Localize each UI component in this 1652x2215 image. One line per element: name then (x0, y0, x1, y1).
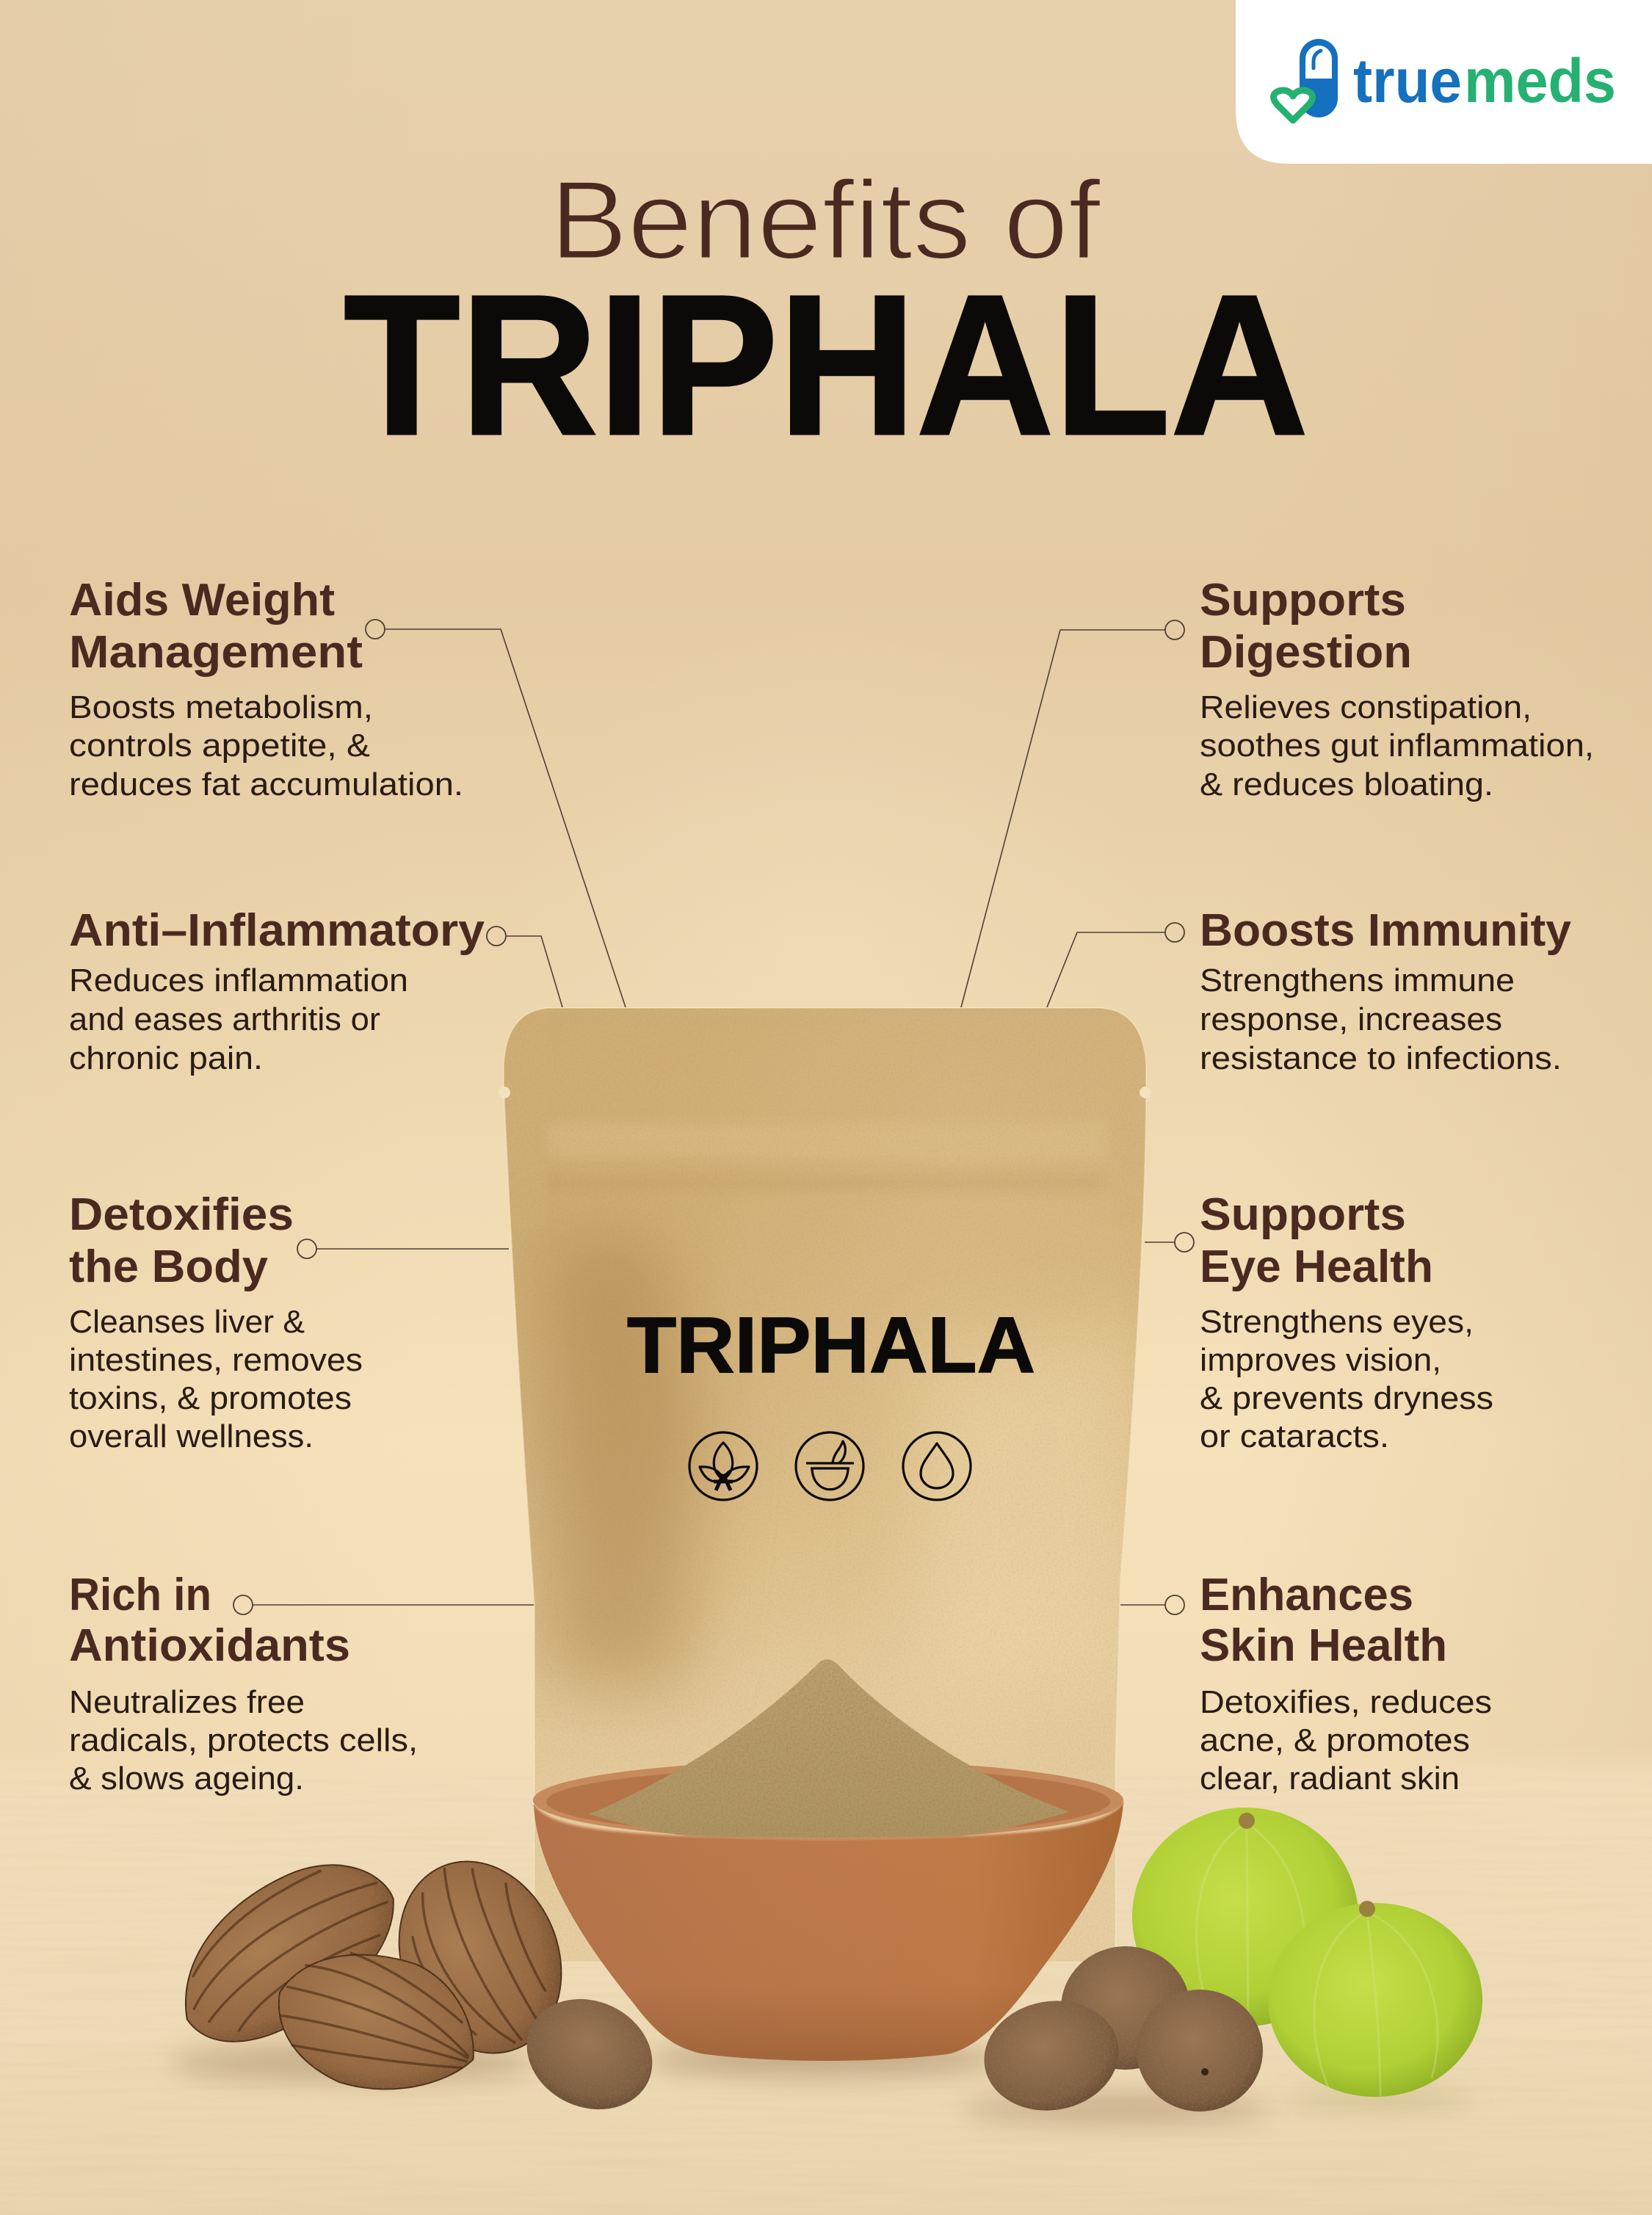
benefit: rich in antioxidants: Antioxidants (69, 1620, 350, 1671)
benefit: boosts immunity: response, increases (1200, 1001, 1502, 1037)
nut A (976, 1990, 1127, 2121)
nuts: left group (149, 1836, 670, 2129)
nut B (1061, 1946, 1190, 2070)
benefit: supports digestion: Digestion (1200, 627, 1412, 678)
pouch label: TRIPHALA (627, 1300, 1035, 1389)
benefit: detoxifies the body: toxins, & promotes (69, 1380, 352, 1416)
logo panel: truemeds (1236, 0, 1652, 164)
benefit: detoxifies the body: Detoxifies (69, 1189, 294, 1240)
benefit: detoxifies the body: overall wellness. (69, 1418, 314, 1454)
benefit: boosts immunity: Strengthens immune (1200, 963, 1515, 998)
benefit: rich in antioxidants: & slows ageing. (69, 1761, 304, 1797)
benefit: anti-inflammatory: and eases arthritis or (69, 1001, 380, 1037)
connector lines (233, 620, 1194, 1614)
benefit: enhances skin health: Detoxifies, reduces (1200, 1684, 1492, 1720)
icon: capsule (1300, 39, 1338, 117)
nuts: right group (962, 1946, 1270, 2122)
benefit: rich in antioxidants: radicals, protects cells, (69, 1722, 418, 1758)
benefit: enhances skin health: Enhances (1200, 1570, 1413, 1620)
title line 2: TRIPHALA (344, 253, 1308, 476)
benefit: aids weight management: Management (69, 627, 363, 678)
icon: drop (903, 1432, 971, 1500)
benefit: supports eye health: Strengthens eyes, (1200, 1304, 1474, 1340)
benefit: anti-inflammatory: Reduces inflammation (69, 963, 408, 998)
benefit: detoxifies the body (69, 1189, 363, 1454)
benefit: enhances skin health: acne, & promotes (1200, 1722, 1470, 1758)
notches (499, 1087, 510, 1098)
benefit: aids weight management: Boosts metabolism, (69, 689, 373, 725)
benefit: supports digestion (1200, 575, 1594, 802)
amla fruit: front (1268, 1901, 1482, 2097)
benefit: boosts immunity (1200, 905, 1572, 1076)
nut 1 (149, 1836, 424, 2067)
bowl with powder (533, 1659, 1123, 2076)
benefit: supports digestion: soothes gut inflammation, (1200, 728, 1594, 764)
benefit: supports digestion: Relieves constipation, (1200, 689, 1532, 725)
bowl inside (533, 1761, 1123, 1840)
benefit: enhances skin health: clear, radiant skin (1200, 1761, 1460, 1797)
benefit: anti-inflammatory (69, 905, 485, 1076)
benefit: aids weight management (69, 575, 463, 802)
benefit: detoxifies the body: Cleanses liver & (69, 1304, 305, 1340)
benefit: aids weight management: Aids Weight (69, 575, 335, 626)
logo wordmark: true (1353, 46, 1462, 115)
benefit: enhances skin health: Skin Health (1200, 1620, 1447, 1671)
benefit: supports digestion: & reduces bloating. (1200, 766, 1493, 802)
icon: heart (1274, 90, 1312, 120)
pouch (499, 1008, 1153, 1962)
nut 4 (509, 1979, 670, 2129)
icon: mortar (796, 1432, 863, 1500)
benefit: supports eye health: Supports (1200, 1189, 1406, 1240)
benefit: aids weight management: controls appetite, & (69, 728, 370, 764)
title line 1: Benefits of (550, 158, 1101, 283)
icon: leaf (689, 1432, 757, 1500)
bowl body (534, 1802, 1123, 2061)
logo wordmark: meds (1464, 46, 1616, 115)
benefit: supports digestion: Supports (1200, 575, 1406, 626)
benefit: supports eye health: Eye Health (1200, 1241, 1433, 1292)
benefit: supports eye health: or cataracts. (1200, 1418, 1389, 1454)
title (344, 158, 1308, 476)
benefit: supports eye health: & prevents dryness (1200, 1380, 1493, 1416)
benefit: detoxifies the body: intestines, removes (69, 1342, 363, 1378)
benefit: supports eye health (1200, 1189, 1493, 1454)
benefit: supports eye health: improves vision, (1200, 1342, 1441, 1378)
nut 2 (372, 1837, 589, 2078)
benefit: rich in antioxidants: Rich in (69, 1570, 211, 1620)
benefit: rich in antioxidants: Neutralizes free (69, 1684, 305, 1720)
benefit: boosts immunity: resistance to infections. (1200, 1040, 1562, 1076)
benefit: boosts immunity: Boosts Immunity (1200, 905, 1572, 956)
nut 3 (261, 1932, 493, 2114)
powder pile (589, 1659, 1069, 1846)
amla fruit: back (1132, 1808, 1476, 2109)
benefit: anti-inflammatory: Anti–Inflammatory (69, 905, 485, 956)
benefit: enhances skin health (1200, 1570, 1492, 1797)
nut C (1137, 1990, 1263, 2111)
benefit: anti-inflammatory: chronic pain. (69, 1040, 263, 1076)
benefit: detoxifies the body: the Body (69, 1241, 269, 1292)
benefit: rich in antioxidants (69, 1570, 418, 1797)
benefit: aids weight management: reduces fat accumulation. (69, 766, 463, 802)
